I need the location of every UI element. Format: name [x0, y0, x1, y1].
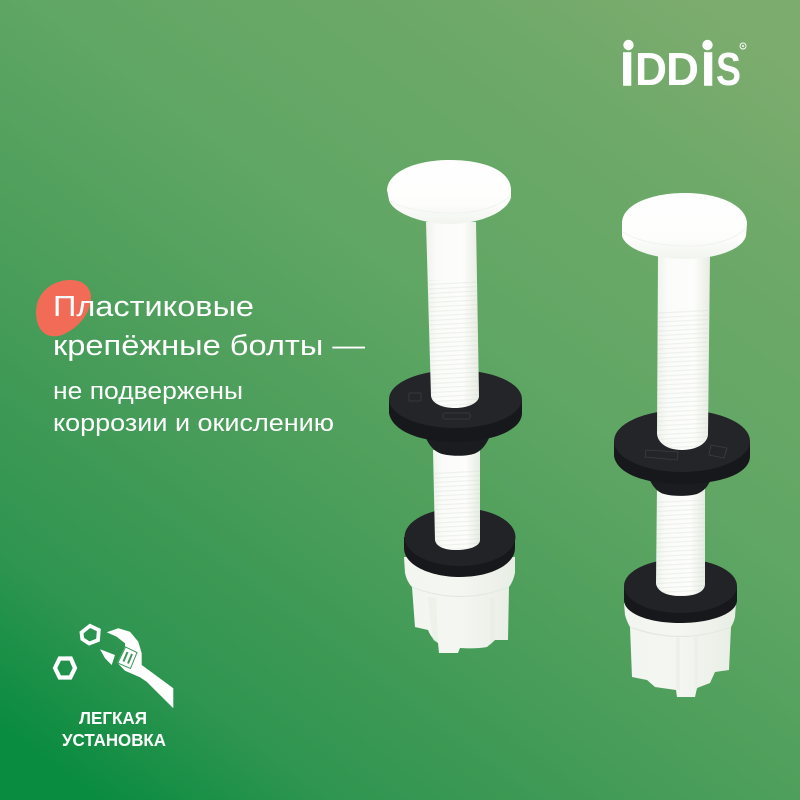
bolt assembly left [387, 160, 522, 653]
bolt assembly right [614, 193, 750, 697]
logo: IDDIS [621, 40, 746, 95]
subheading: коррозии и окислению [53, 410, 334, 437]
nut left [404, 557, 515, 653]
upper shank left [426, 222, 479, 408]
label: easy installation [62, 708, 166, 750]
icon: wrench and nuts [55, 626, 173, 708]
head left [387, 160, 511, 224]
head right [622, 193, 747, 259]
lower shank left [433, 450, 480, 550]
label: easy installation: ЛЕГКАЯ [79, 708, 147, 728]
subheading [53, 378, 334, 437]
logo: IDDIS: I [621, 43, 634, 95]
nut right [624, 603, 736, 697]
lower shank right [656, 485, 705, 596]
lower washer left [404, 508, 516, 577]
heading: Пластиковые [53, 291, 254, 323]
heading: крепёжные болты — [53, 330, 365, 362]
upper shank right [657, 256, 710, 450]
icon: wrench [100, 628, 173, 708]
icon: nut large [55, 658, 75, 678]
icon: nut small [82, 626, 99, 644]
label: easy installation: УСТАНОВКА [62, 730, 166, 750]
subheading: не подвержены [53, 378, 243, 405]
accent blob [36, 280, 91, 336]
cone washer left [425, 436, 490, 456]
upper washer left [389, 370, 522, 442]
logo: IDDIS: D [666, 43, 699, 95]
cone washer right [648, 476, 712, 496]
heading [53, 291, 365, 362]
logo: IDDIS: S [716, 43, 741, 95]
upper washer right [614, 410, 750, 484]
logo: IDDIS: D [635, 43, 667, 95]
logo: IDDIS: I [702, 43, 715, 95]
lower washer right [624, 559, 737, 623]
